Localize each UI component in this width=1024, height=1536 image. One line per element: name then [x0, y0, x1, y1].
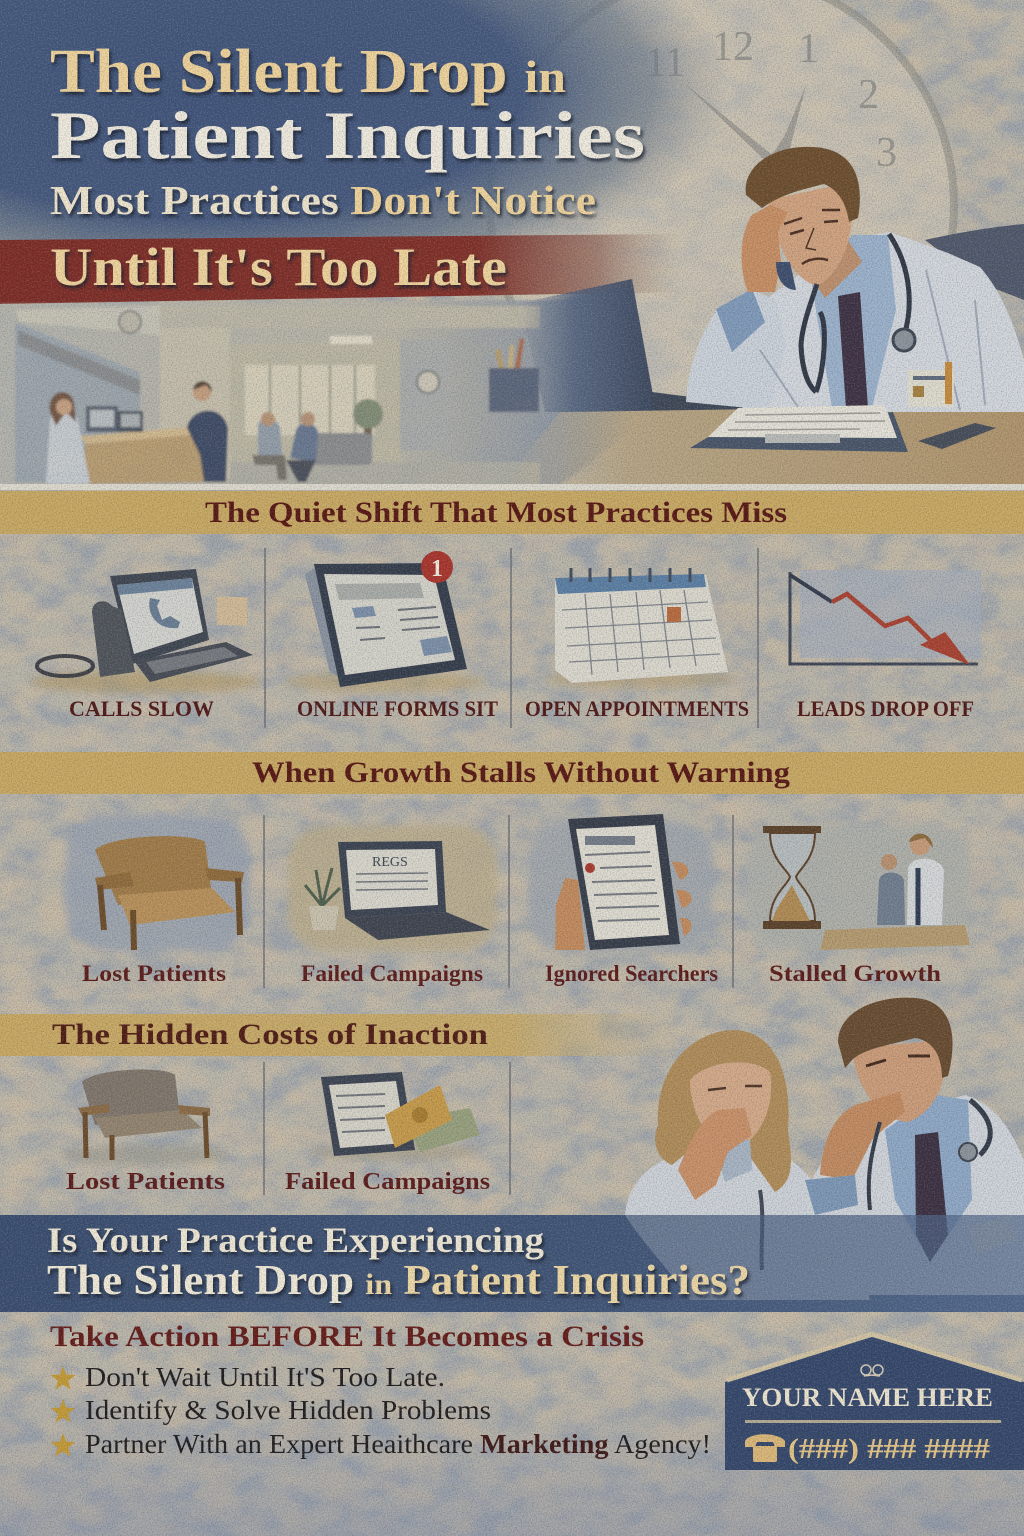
band heading text: The Silent Drop in Patient Inquiries?: [47, 1258, 750, 1304]
icon: tablet with notification: [285, 551, 485, 692]
face: [768, 182, 853, 286]
panel: red banner: [0, 234, 680, 304]
label: failed campaigns: Failed Campaigns: [301, 961, 483, 986]
sign name: YOUR NAME HERE: [742, 1383, 993, 1412]
heading: when growth stalls: [0, 752, 1024, 794]
clock background: [490, 0, 954, 437]
hand on head: [742, 205, 788, 292]
band heading text: Is Your Practice Experiencing: [47, 1220, 544, 1260]
clock background: 11: [645, 40, 685, 86]
bullet: identify and solve: Identify & Solve Hidden Problems: [85, 1395, 491, 1425]
title: Patient Inquiries: [50, 97, 645, 173]
panel: growth stalls icons: [66, 814, 970, 988]
icon: laptop on desk with plant: REGS: [372, 855, 408, 870]
subheading: take action: Take Action BEFORE It Becomes a Crisis: [50, 1320, 644, 1353]
heading: hidden costs: The Hidden Costs of Inaction: [52, 1018, 488, 1051]
notification badge: 1: [431, 556, 443, 582]
stethoscope: [801, 234, 909, 392]
sign phone number: (###) ### ####: [788, 1434, 990, 1465]
panel: quiet shift icons: [30, 548, 981, 728]
neck: [806, 240, 862, 298]
illustration: office lobby: [0, 285, 655, 485]
section divider line: [0, 484, 1024, 490]
pen cup: [489, 338, 539, 412]
hair: [746, 147, 860, 222]
icon: laptop on desk with plant: [288, 825, 497, 951]
notification badge: [421, 551, 453, 583]
title: Most Practices Don't Notice: [50, 177, 596, 223]
facial features: [784, 210, 840, 264]
man in suit: [187, 381, 228, 482]
panel: call to action band: [0, 1215, 1024, 1312]
band heading text: [47, 1220, 750, 1304]
receptionist: [46, 392, 90, 484]
ID badge: [908, 362, 954, 407]
man doctor: [805, 998, 1024, 1295]
bullet: don't wait: Don't Wait Until It'S Too Late.: [85, 1362, 445, 1392]
band tint over coats: [0, 1215, 1024, 1312]
icon: telephone: [745, 1434, 785, 1462]
illustration: laptop: [520, 279, 745, 414]
reception desk: [85, 430, 205, 484]
icon: knot emblem: [861, 1365, 883, 1376]
illustration: worried doctor: [686, 147, 1024, 412]
title: [50, 38, 645, 223]
panel: hidden costs icons: [60, 1062, 510, 1195]
icon: hand holding phone: [528, 814, 712, 951]
woman doctor: [625, 1030, 870, 1300]
clock background: 3: [876, 130, 897, 176]
title: The Silent Drop in: [50, 38, 566, 106]
label: failed campaigns repeat: Failed Campaigns: [285, 1169, 490, 1195]
monitors: [86, 406, 143, 432]
label: ignored searchers: Ignored Searchers: [545, 961, 718, 986]
illustration: clipboard and paperwork: [690, 405, 908, 452]
bullet list: [51, 1362, 711, 1459]
label: lost patients repeat: Lost Patients: [66, 1169, 225, 1195]
header blue background: [0, 0, 760, 310]
heading: the quiet shift: [0, 491, 1024, 534]
icon: grey armchair: [60, 1070, 230, 1165]
sofa: [310, 433, 372, 465]
icon: desk phone and monitor: [30, 569, 260, 693]
label: stalled growth: Stalled Growth: [769, 961, 941, 986]
seated people: [252, 412, 318, 482]
heading: the quiet shift: The Quiet Shift That Most Practices Miss: [205, 496, 787, 529]
coat: [742, 232, 1024, 412]
plant: [353, 399, 383, 442]
icon: hourglass and staff: [746, 825, 970, 951]
icon: tablet with cash: [310, 1072, 480, 1160]
icon: empty armchair: [66, 815, 250, 951]
label: online forms sit: ONLINE FORMS SIT: [297, 696, 498, 721]
heading: when growth stalls: When Growth Stalls Without Warning: [252, 756, 790, 789]
clock background: 1: [798, 26, 819, 72]
chart: leads dropping: [790, 570, 981, 665]
tie: [838, 292, 868, 408]
label: calls slow: CALLS SLOW: [69, 696, 214, 721]
clock background: 12: [712, 24, 754, 70]
label: leads drop off: LEADS DROP OFF: [797, 696, 974, 721]
bullet: partner with agency: Partner With an Expert Heaithcare Marketing Agency!: [85, 1429, 711, 1459]
illustration: two concerned doctors: [625, 998, 1024, 1300]
heading: hidden costs: [0, 1014, 680, 1056]
panel: contact sign: [725, 1334, 1024, 1470]
icon: smartphone on desk: [918, 423, 996, 449]
illustration: desk: [500, 405, 1024, 486]
chair back: [925, 224, 1024, 300]
banner text: until it's too late: Until It's Too Late: [50, 237, 507, 297]
clock background: 2: [858, 72, 879, 118]
icon: wall calendar: [545, 568, 735, 688]
label: open appointments: OPEN APPOINTMENTS: [525, 696, 749, 721]
shirt: [812, 235, 896, 408]
label: lost patients: Lost Patients: [82, 961, 226, 986]
